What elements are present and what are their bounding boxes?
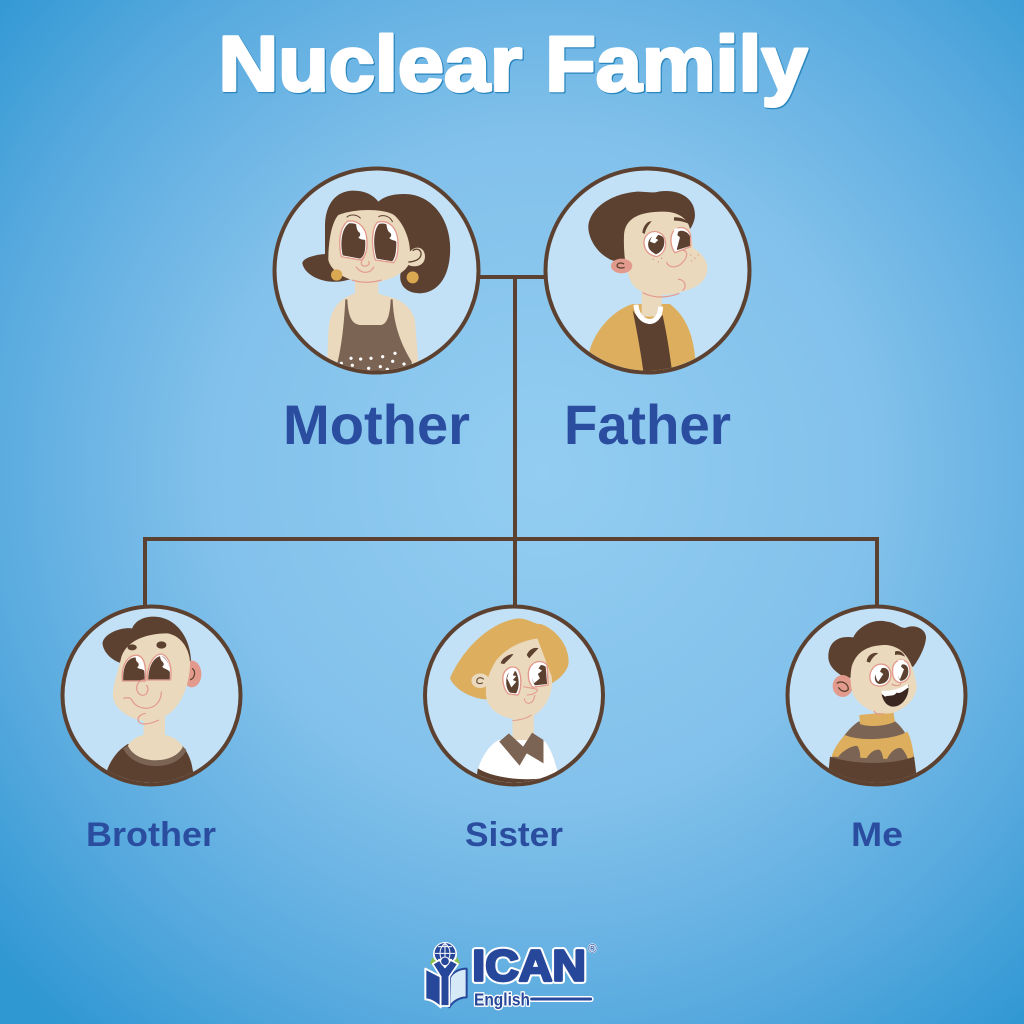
portrait: brother <box>62 606 240 790</box>
wordmark: English: English <box>474 989 530 1009</box>
title: Nuclear Family <box>220 20 808 108</box>
title: Nuclear Family <box>218 20 808 108</box>
label: Sister: Sister <box>465 816 563 854</box>
label: Brother: Brother <box>86 816 216 854</box>
icon: globe and open book <box>425 942 467 1007</box>
wordmark: ICAN: ICAN <box>472 941 586 990</box>
portrait: me <box>788 606 966 790</box>
portrait: sister <box>425 606 603 790</box>
underline <box>532 990 591 1008</box>
label: Me: Me <box>851 816 903 854</box>
family tree connectors <box>145 277 877 605</box>
logo: ICAN English <box>425 941 597 1009</box>
wordmark: ICAN: ICAN <box>472 941 586 990</box>
portrait: father <box>546 168 750 377</box>
portrait: mother <box>274 168 478 377</box>
registered mark: ® <box>588 942 597 956</box>
label: Mother: Mother <box>283 393 470 456</box>
label: Father: Father <box>564 393 731 456</box>
